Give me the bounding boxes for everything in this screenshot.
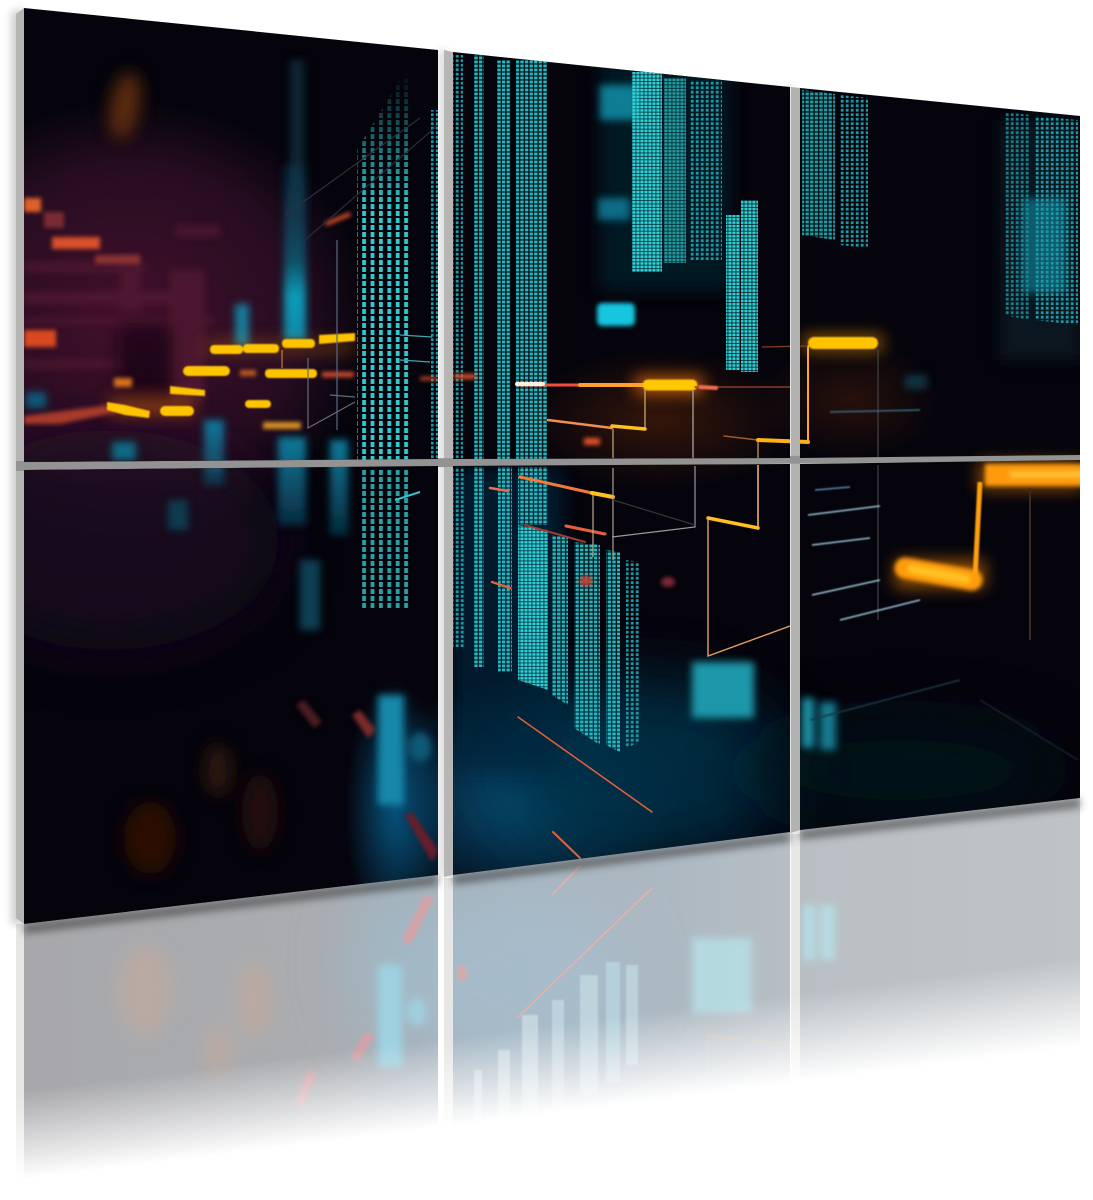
yellow neon dashes, left steps — [107, 333, 355, 418]
blurred red and orange bars, left — [24, 198, 675, 862]
data columns: centre lower panel — [453, 467, 640, 752]
white-blue streaks, right lower panel — [808, 410, 1078, 760]
reflection: cyan bars — [378, 905, 835, 1067]
neon glow halos — [110, 335, 1083, 588]
panel edge shadows — [11, 8, 793, 924]
reflection on the glossy floor — [16, 795, 1080, 1200]
frame edges between panels — [16, 8, 1080, 924]
reflection: orange line and chevron — [517, 866, 790, 1080]
maroon blurred bands, upper left — [24, 225, 220, 400]
reflection: blue haze — [358, 904, 602, 1048]
dark blurred tower in maroon haze — [118, 325, 170, 395]
haze: maroon left, blue floor, amber centre — [0, 60, 1080, 940]
data column: left panels — [357, 60, 438, 608]
artwork base colour — [16, 0, 1086, 930]
reflection: grey gloss base — [24, 795, 1080, 1200]
contact shadow under the panels — [24, 803, 1080, 929]
reflection: frame edge strips — [16, 834, 800, 1152]
circuit step lines, thin — [282, 118, 878, 656]
orange neon streaks, centre — [490, 384, 808, 858]
reflection: data columns — [474, 962, 638, 1099]
bright cyan block, centre — [597, 303, 635, 326]
blurred amber blobs — [104, 70, 278, 874]
scene: artwork across all six panels — [0, 0, 1086, 940]
reflection: soft colour ghosts — [119, 866, 835, 1130]
reflection: blurred amber ghosts — [119, 945, 273, 1076]
data columns: right upper panel — [802, 90, 1078, 325]
data columns: centre upper panel — [453, 55, 758, 460]
reflection: red streaks — [296, 895, 467, 1108]
blurred cyan light bars — [26, 60, 1066, 805]
big amber neon step, right — [808, 337, 1085, 640]
